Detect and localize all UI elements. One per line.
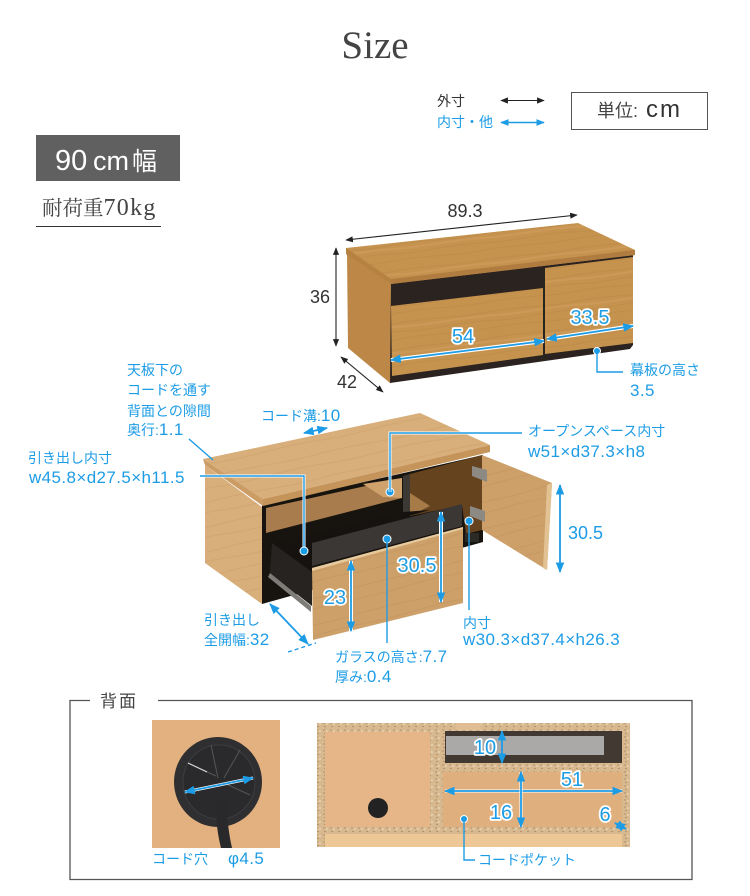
- right compartment interior: [410, 455, 482, 534]
- dimension: drawer width 54: [391, 326, 544, 360]
- dimension: depth 42: [337, 357, 383, 392]
- callout: cord pocket: コードポケット: [478, 852, 576, 868]
- dimension: drawer height 23: [324, 561, 351, 631]
- callout: plinth height: 3.5: [630, 381, 655, 400]
- unit box: cm: [646, 96, 682, 123]
- callout: open space: w51×d37.3×h8: [527, 442, 645, 461]
- callout: compartment inner size: 内寸: [463, 615, 491, 631]
- drawer side: [270, 543, 312, 606]
- callout: open space: [386, 423, 665, 496]
- dimension: height 36: 36: [310, 287, 330, 307]
- dimension: door height 30.5: 30.5: [568, 523, 603, 543]
- callout: glass height: [335, 535, 447, 686]
- caption: hole diameter: φ4.5: [228, 849, 264, 868]
- callout: drawer full extension: 引き出し: [204, 612, 260, 628]
- panel: back side: [70, 692, 692, 880]
- callout: drawer full extension: [204, 604, 316, 652]
- partition: [403, 474, 410, 515]
- dimension: drawer height 23: 23: [324, 587, 346, 609]
- heading: back: 背面: [100, 692, 138, 711]
- callout: rear gap: 背面との隙間: [127, 403, 211, 419]
- interior black: [262, 455, 483, 604]
- dimension: overall width 89.3: 89.3: [447, 201, 483, 221]
- callout: glass height: ガラスの高さ:7.7: [335, 647, 447, 666]
- callout: compartment inner size: w30.3×d37.4×h26.3: [462, 630, 620, 649]
- dimension: drawer width 54: 54: [452, 326, 474, 348]
- callout: plinth height: 幕板の高さ: [630, 362, 700, 378]
- left side panel: [205, 465, 262, 604]
- callout: cord pocket: [460, 816, 576, 868]
- door: [482, 455, 552, 570]
- title: Size: [341, 24, 409, 67]
- callout: open space: オープンスペース内寸: [528, 423, 665, 439]
- legend: dimension line types: 外寸: [437, 93, 465, 109]
- caption: cord hole: コード穴: [152, 851, 208, 867]
- slide rail: [268, 573, 311, 612]
- dimension: door width 33.5: [547, 307, 633, 339]
- callout: plinth height: [594, 348, 700, 400]
- drawer front: [312, 527, 463, 640]
- photo: back panel: [317, 723, 630, 847]
- dimension: 51: 51: [561, 769, 583, 791]
- front backing: [389, 253, 633, 383]
- callout: rear gap: [127, 362, 213, 460]
- unit box: 単位:: [597, 101, 638, 121]
- closed furniture illustration: [346, 223, 635, 383]
- open furniture illustration: [203, 413, 552, 640]
- callout: glass height: 厚み:0.4: [335, 667, 392, 686]
- dimension: inner height 30.5: [398, 512, 441, 602]
- top board: [346, 223, 635, 284]
- photo: cord hole grommet: [152, 720, 280, 848]
- width badge: 90cm: cm: [93, 146, 129, 176]
- legend: dimension line types: [437, 93, 544, 130]
- side panel: [347, 254, 391, 383]
- drawer interior: [272, 510, 430, 572]
- callout: rear gap: コードを通す: [127, 382, 211, 398]
- dimension: door height 30.5: [560, 485, 603, 572]
- top board: [203, 413, 490, 499]
- drawer front: [391, 288, 543, 376]
- hinges: [472, 466, 487, 482]
- callout: compartment inner size: [462, 517, 620, 649]
- callout: drawer interior: [28, 450, 308, 555]
- callout: rear gap: 天板下の: [127, 362, 183, 378]
- callout: drawer full extension: 全開幅:32: [204, 630, 270, 649]
- dimension: depth 42: 42: [337, 372, 357, 392]
- dimension: 16: 16: [490, 802, 512, 824]
- dimension: 16: [490, 772, 521, 827]
- width badge: 90cm: [36, 135, 180, 181]
- glass panel: [312, 504, 462, 566]
- door: [545, 257, 633, 354]
- dimension: 6: 6: [599, 804, 611, 826]
- dimension: 10: 10: [474, 737, 496, 759]
- callout: rear gap: 奥行:1.1: [127, 420, 184, 439]
- callout: cord groove: コード溝:10: [261, 406, 341, 425]
- dimension: 10: [474, 731, 502, 763]
- dimension: 6: [599, 804, 626, 829]
- callout: drawer interior: w45.8×d27.5×h11.5: [28, 468, 185, 487]
- dimension: door width 33.5: 33.5: [571, 307, 609, 329]
- width badge: 90cm: 90: [55, 145, 87, 177]
- load capacity: 耐荷重70kg: [42, 195, 157, 221]
- dimension: inner height 30.5: 30.5: [398, 555, 436, 577]
- width badge: 90cm: 幅: [132, 148, 157, 176]
- open shelf back: [266, 478, 402, 533]
- legend: dimension line types: 内寸・他: [437, 114, 493, 130]
- callout: drawer interior: 引き出し内寸: [28, 450, 112, 466]
- unit box: [572, 92, 708, 130]
- dimension: overall width 89.3: [346, 201, 577, 240]
- dimension: height 36: [310, 248, 336, 346]
